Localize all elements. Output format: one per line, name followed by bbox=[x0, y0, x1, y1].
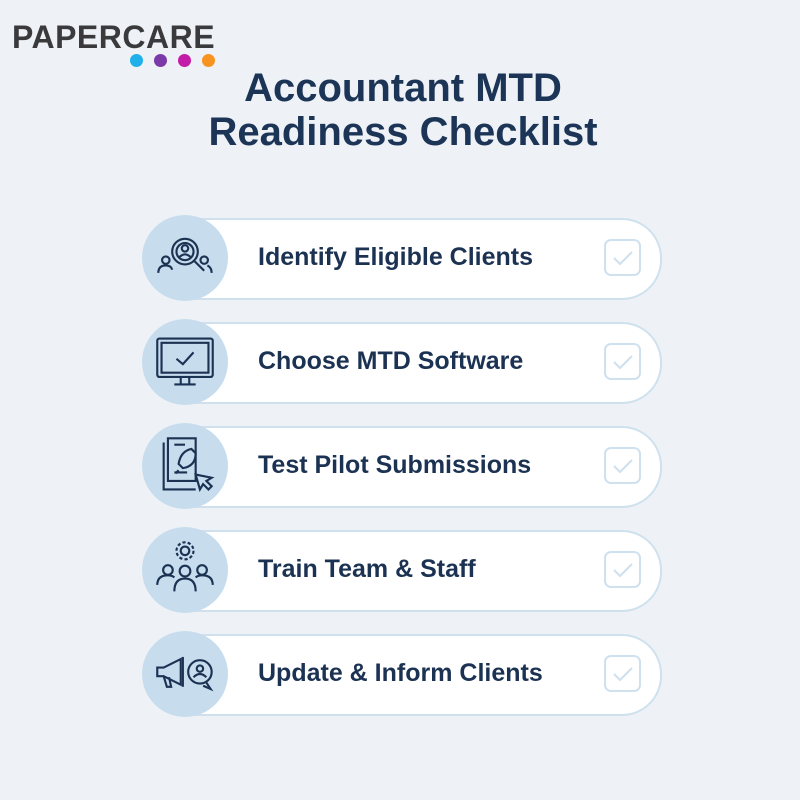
icon: monitor check bbox=[142, 319, 228, 405]
checkbox bbox=[604, 551, 641, 588]
icon: people search bbox=[142, 215, 228, 301]
row: train bbox=[142, 527, 662, 613]
checkbox bbox=[604, 239, 641, 276]
label: Choose MTD Software bbox=[258, 347, 523, 375]
checkbox bbox=[604, 655, 641, 692]
row: identify bbox=[142, 215, 662, 301]
checkbox bbox=[604, 343, 641, 380]
icon: document rocket bbox=[142, 423, 228, 509]
row: software bbox=[142, 319, 662, 405]
title: Accountant MTD bbox=[244, 66, 562, 110]
logo: PAPERCARE bbox=[12, 19, 215, 55]
label: Update & Inform Clients bbox=[258, 659, 543, 687]
icon: megaphone chat bbox=[142, 631, 228, 717]
title bbox=[208, 66, 598, 154]
icon: team gear bbox=[142, 527, 228, 613]
label: Identify Eligible Clients bbox=[258, 243, 533, 271]
title: Readiness Checklist bbox=[208, 110, 598, 154]
checkbox bbox=[604, 447, 641, 484]
row: pilot bbox=[142, 423, 662, 509]
logo dots bbox=[130, 54, 215, 67]
row: inform bbox=[142, 631, 662, 717]
label: Test Pilot Submissions bbox=[258, 451, 531, 479]
label: Train Team & Staff bbox=[258, 555, 476, 583]
